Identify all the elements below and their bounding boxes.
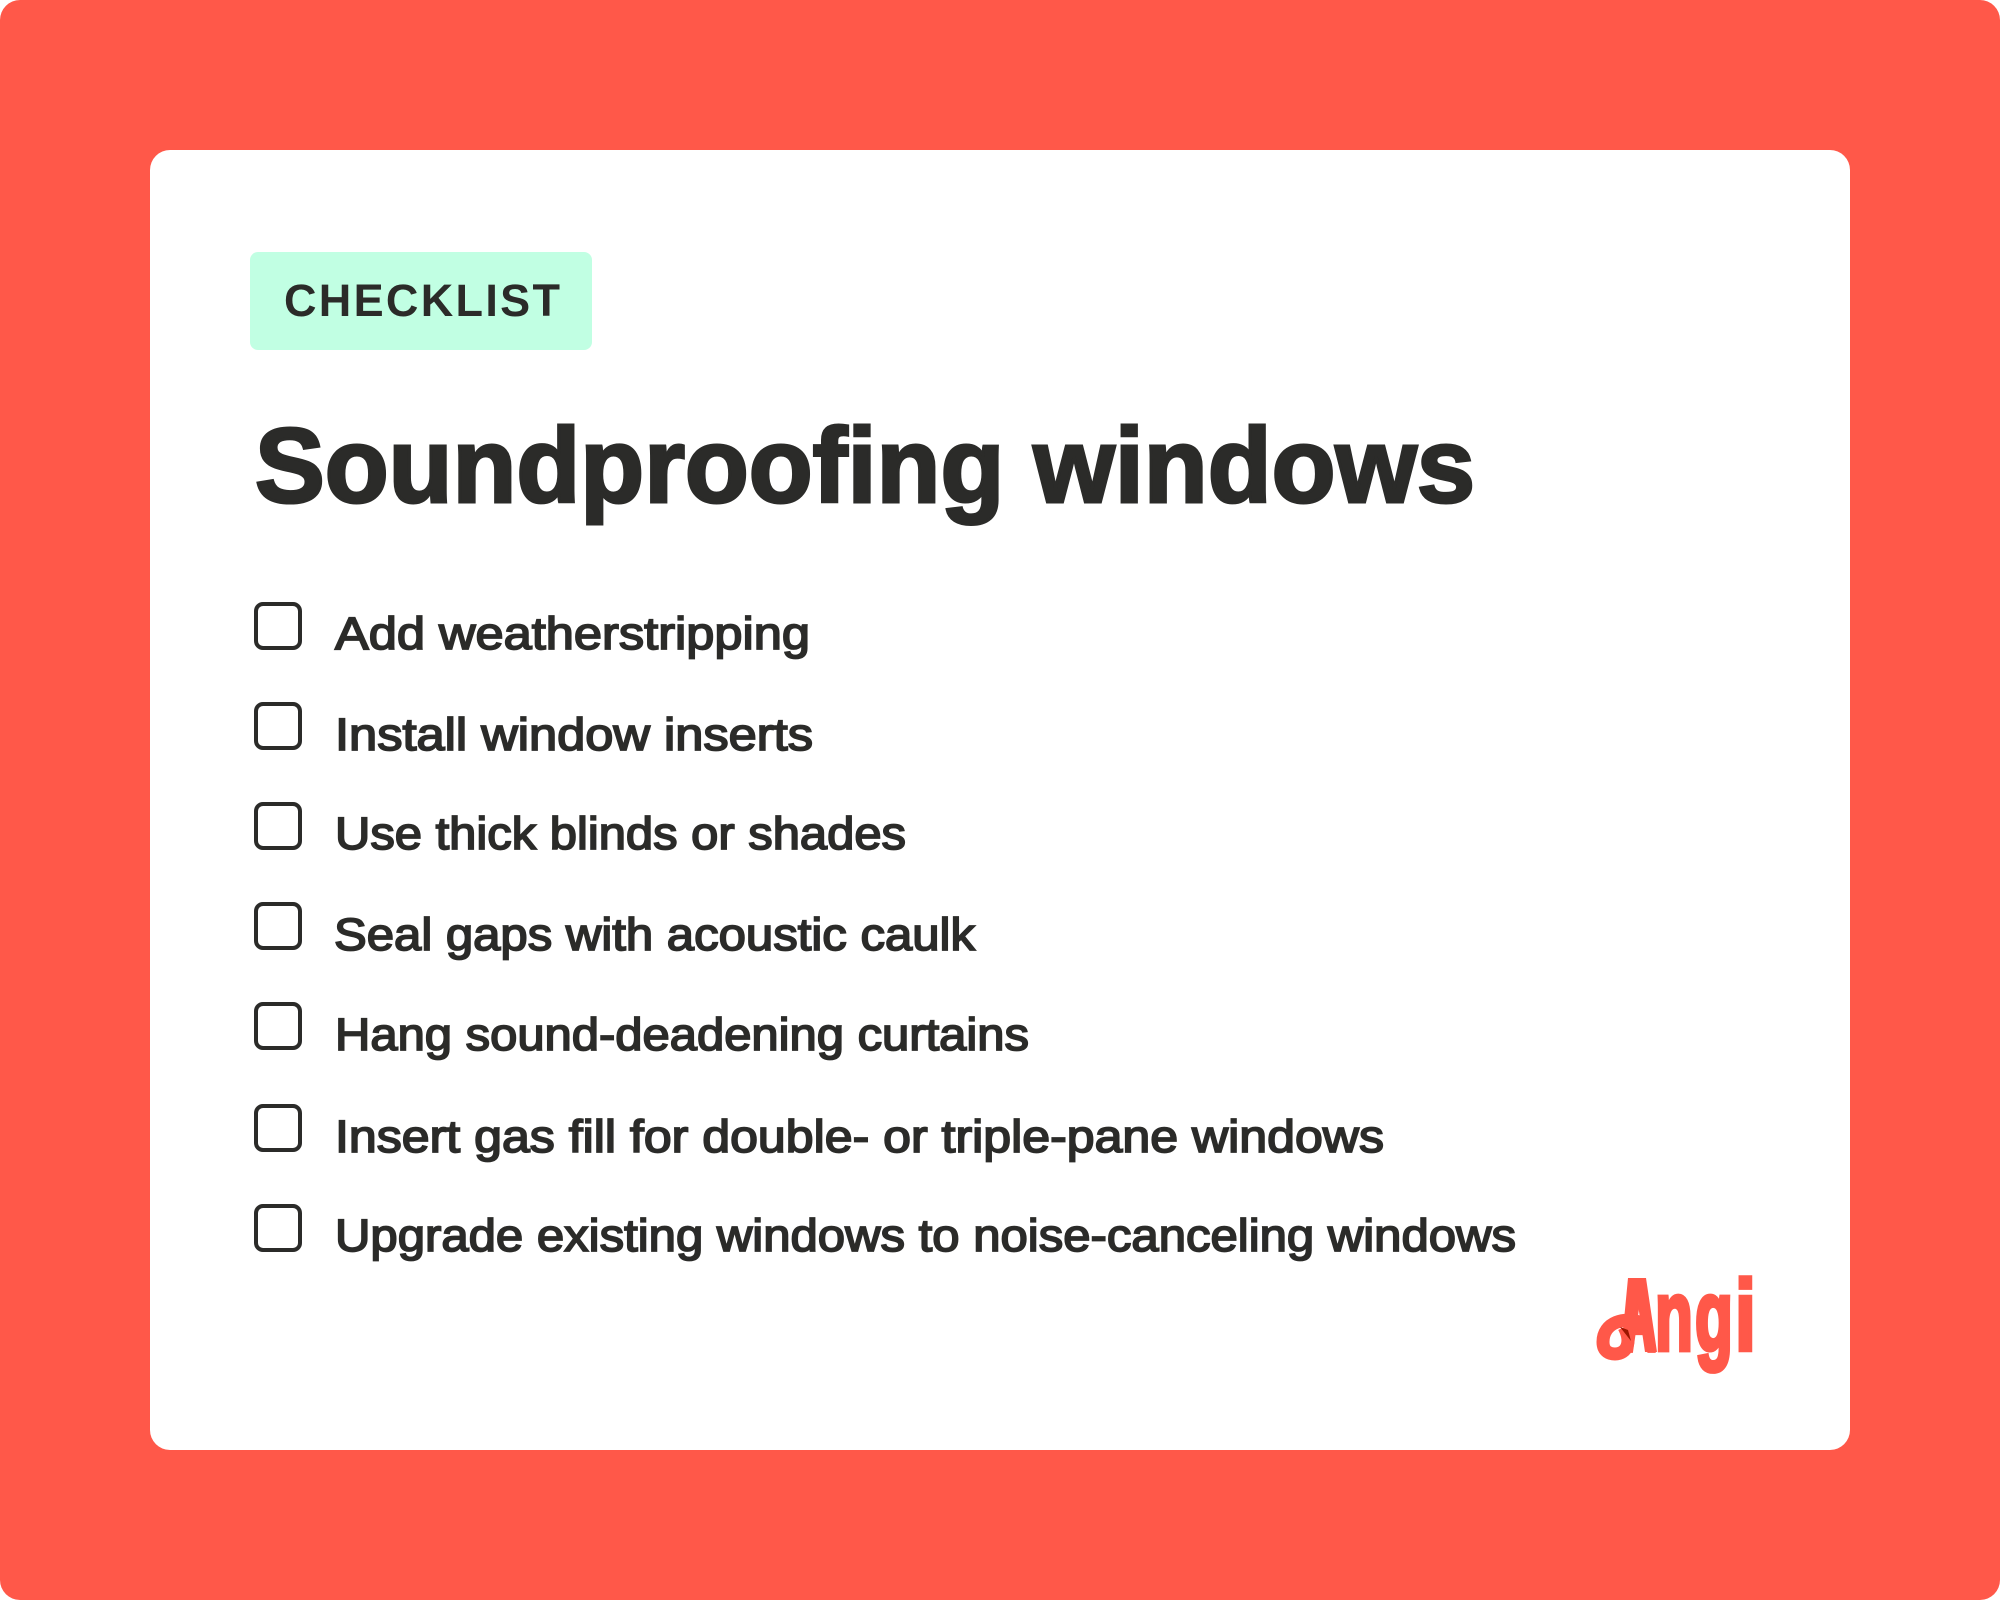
checklist item 5: Hang sound-deadening curtains <box>335 1009 1029 1060</box>
Angi logo: i <box>1735 1259 1756 1371</box>
Angi logo: n <box>1655 1260 1693 1372</box>
checklist item 3: Use thick blinds or shades <box>335 808 906 859</box>
checklist item 2 <box>256 704 813 760</box>
title: Soundproofing windows <box>255 407 1475 525</box>
badge: checklist <box>250 252 592 350</box>
Angi logo: g <box>1695 1260 1733 1372</box>
badge: checklist: CHECKLIST <box>284 275 560 326</box>
white checklist card <box>150 150 1850 1450</box>
checklist item 7: Upgrade existing windows to noise-canceling windows <box>335 1210 1516 1261</box>
Angi logo: A <box>1625 1261 1655 1372</box>
Angi logo <box>1603 1259 1756 1372</box>
checklist item 1: Add weatherstripping <box>335 608 810 659</box>
checklist item 2: Install window inserts <box>335 709 813 760</box>
checklist item 4: Seal gaps with acoustic caulk <box>334 909 976 960</box>
checklist item 6: Insert gas fill for double- or triple-pane windows <box>335 1111 1384 1162</box>
